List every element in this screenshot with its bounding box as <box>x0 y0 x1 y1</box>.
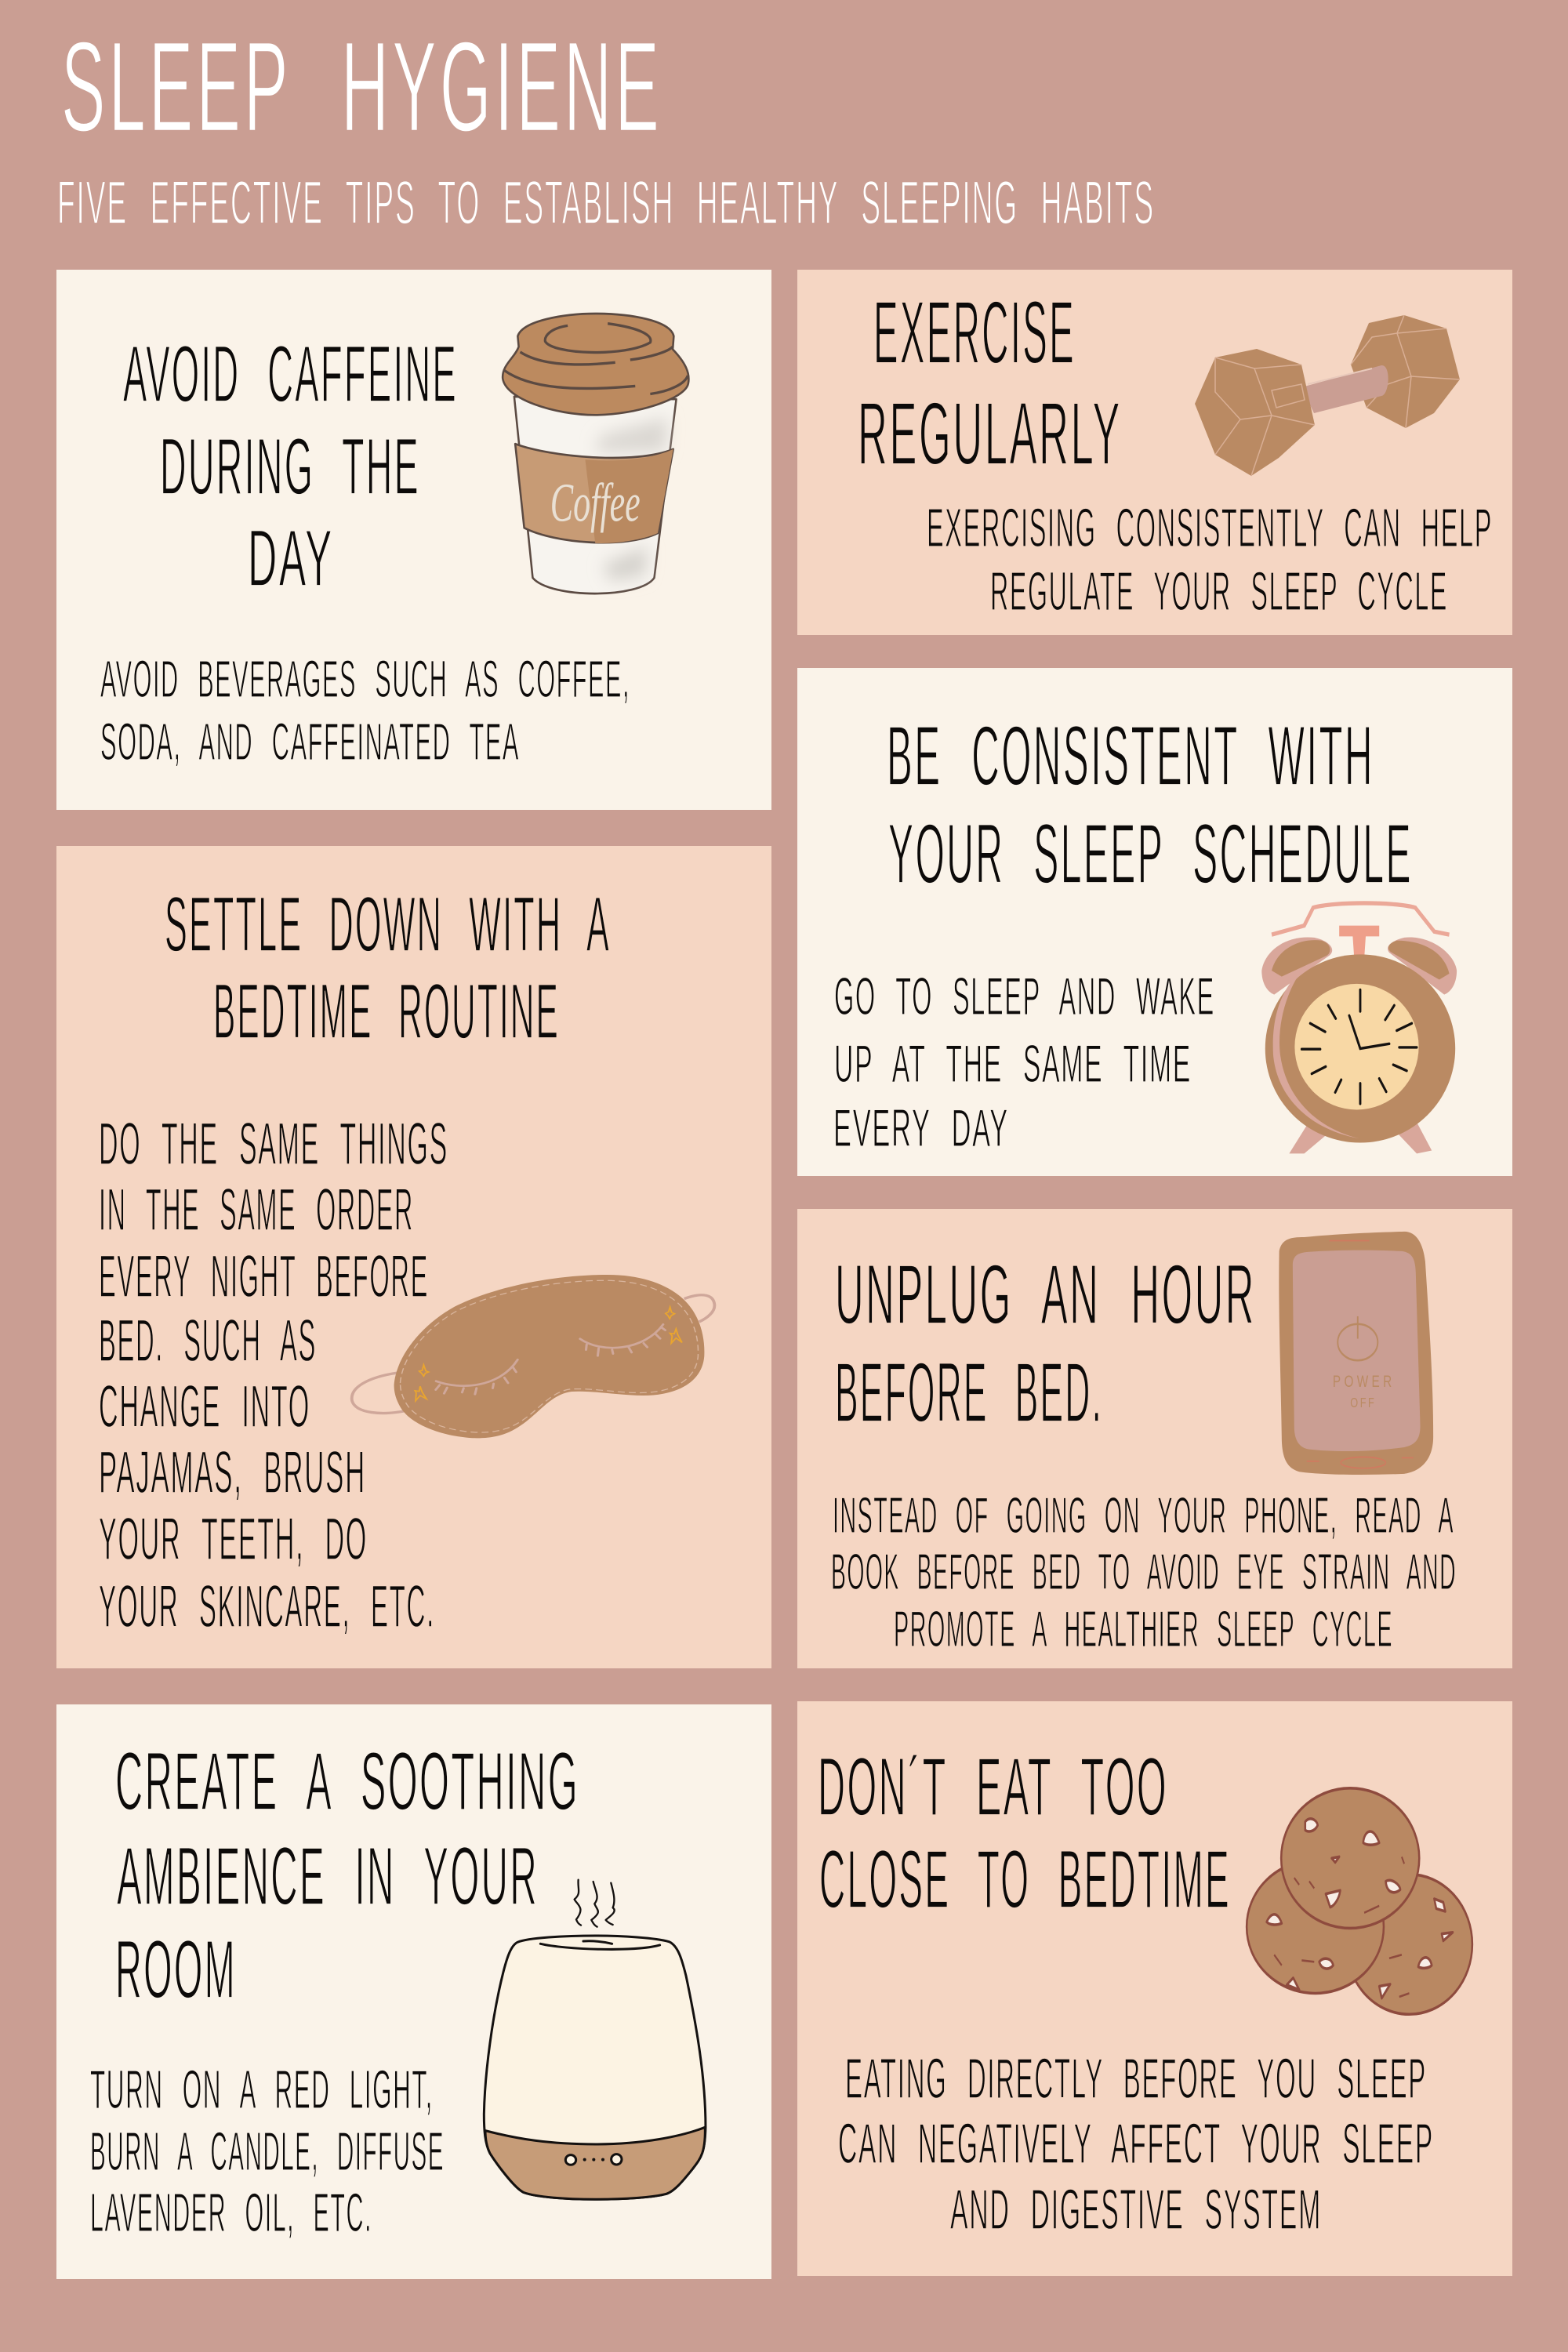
heading: bedtime routine <box>165 880 611 1054</box>
heading: soothing ambience: ROOM <box>115 1924 237 2016</box>
body text: bedtime routine <box>99 1111 448 1640</box>
panel: soothing ambience: AMBIENCE IN YOUR <box>117 1831 539 1922</box>
icon: sleep mask <box>352 1275 714 1438</box>
body text: avoid caffeine <box>100 650 630 771</box>
body text: bedtime routine: CHANGE INTO <box>99 1374 310 1440</box>
icon: phone <box>1279 1232 1433 1475</box>
body text: bedtime routine: PAJAMAS, BRUSH <box>99 1439 366 1506</box>
panel: be consistent <box>797 668 1512 1176</box>
panel: don't eat too close <box>797 1701 1512 2276</box>
power off label <box>1333 1372 1392 1411</box>
body text: bedtime routine: YOUR TEETH, DO <box>99 1506 368 1573</box>
body text: don't eat <box>838 2048 1434 2241</box>
panel: exercise regularly: REGULARLY <box>858 384 1122 483</box>
heading: exercise regularly: EXERCISE <box>873 283 1076 382</box>
panel: bedtime routine <box>56 846 771 1668</box>
power off label: POWER <box>1333 1372 1392 1391</box>
title: SLEEP HYGIENE <box>61 15 662 158</box>
coffee label: Coffee <box>550 472 641 533</box>
panel: avoid caffeine <box>56 270 771 810</box>
body text: avoid caffeine: SODA, AND CAFFEINATED TEA <box>100 713 520 771</box>
panel: bedtime routine: BEDTIME ROUTINE <box>213 967 560 1054</box>
body text: soothing ambience <box>90 2059 445 2243</box>
icon: dumbbell <box>1195 315 1460 476</box>
panel: soothing ambience: TURN ON A RED LIGHT, <box>90 2059 434 2120</box>
panel: unplug <box>797 1209 1512 1668</box>
icon: cookies <box>1247 1788 1472 2014</box>
panel: soothing ambience: CREATE A SOOTHING <box>115 1736 579 1828</box>
panel: avoid caffeine: AVOID BEVERAGES SUCH AS COFFEE, <box>100 650 630 709</box>
icon: coffee cup <box>503 314 688 593</box>
heading: avoid caffeine: DURING THE <box>160 422 420 511</box>
body text: be consistent: EVERY DAY <box>833 1098 1009 1158</box>
heading: avoid caffeine <box>123 329 458 603</box>
body text: be consistent: UP AT THE SAME TIME <box>834 1034 1192 1094</box>
panel: soothing ambience: BURN A CANDLE, DIFFUSE <box>90 2121 445 2182</box>
panel: bedtime routine: SETTLE DOWN WITH A <box>165 880 611 967</box>
heading: don't eat <box>818 1741 1231 1926</box>
heading: unplug <box>835 1247 1256 1439</box>
heading: don't eat: DON´T EAT TOO <box>818 1741 1168 1833</box>
heading: unplug: BEFORE BED. <box>835 1345 1103 1439</box>
icon: alarm clock <box>1261 903 1457 1153</box>
power off label: OFF <box>1350 1396 1374 1411</box>
body text: soothing ambience: LAVENDER OIL, ETC. <box>90 2182 372 2243</box>
icon: diffuser <box>484 1880 706 2199</box>
heading: be consistent <box>887 708 1413 901</box>
panel: bedtime routine: YOUR SKINCARE, ETC. <box>99 1573 435 1640</box>
panel: bedtime routine: EVERY NIGHT BEFORE <box>99 1243 429 1310</box>
panel: bedtime routine: IN THE SAME ORDER <box>99 1177 414 1243</box>
body text: exercise regularly <box>927 497 1493 622</box>
heading: avoid caffeine: DAY <box>248 514 334 603</box>
panel: bedtime routine: DO THE SAME THINGS <box>99 1111 448 1178</box>
panel: exercise regularly <box>797 270 1512 635</box>
body text: be consistent <box>833 967 1215 1158</box>
body text: bedtime routine: BED. SUCH AS <box>99 1308 317 1374</box>
body text: unplug <box>831 1486 1457 1657</box>
heading: exercise regularly <box>858 283 1122 483</box>
panel: avoid caffeine: AVOID CAFFEINE <box>123 329 458 419</box>
heading: soothing ambience <box>115 1736 579 2016</box>
panel: soothing ambience <box>56 1704 771 2279</box>
